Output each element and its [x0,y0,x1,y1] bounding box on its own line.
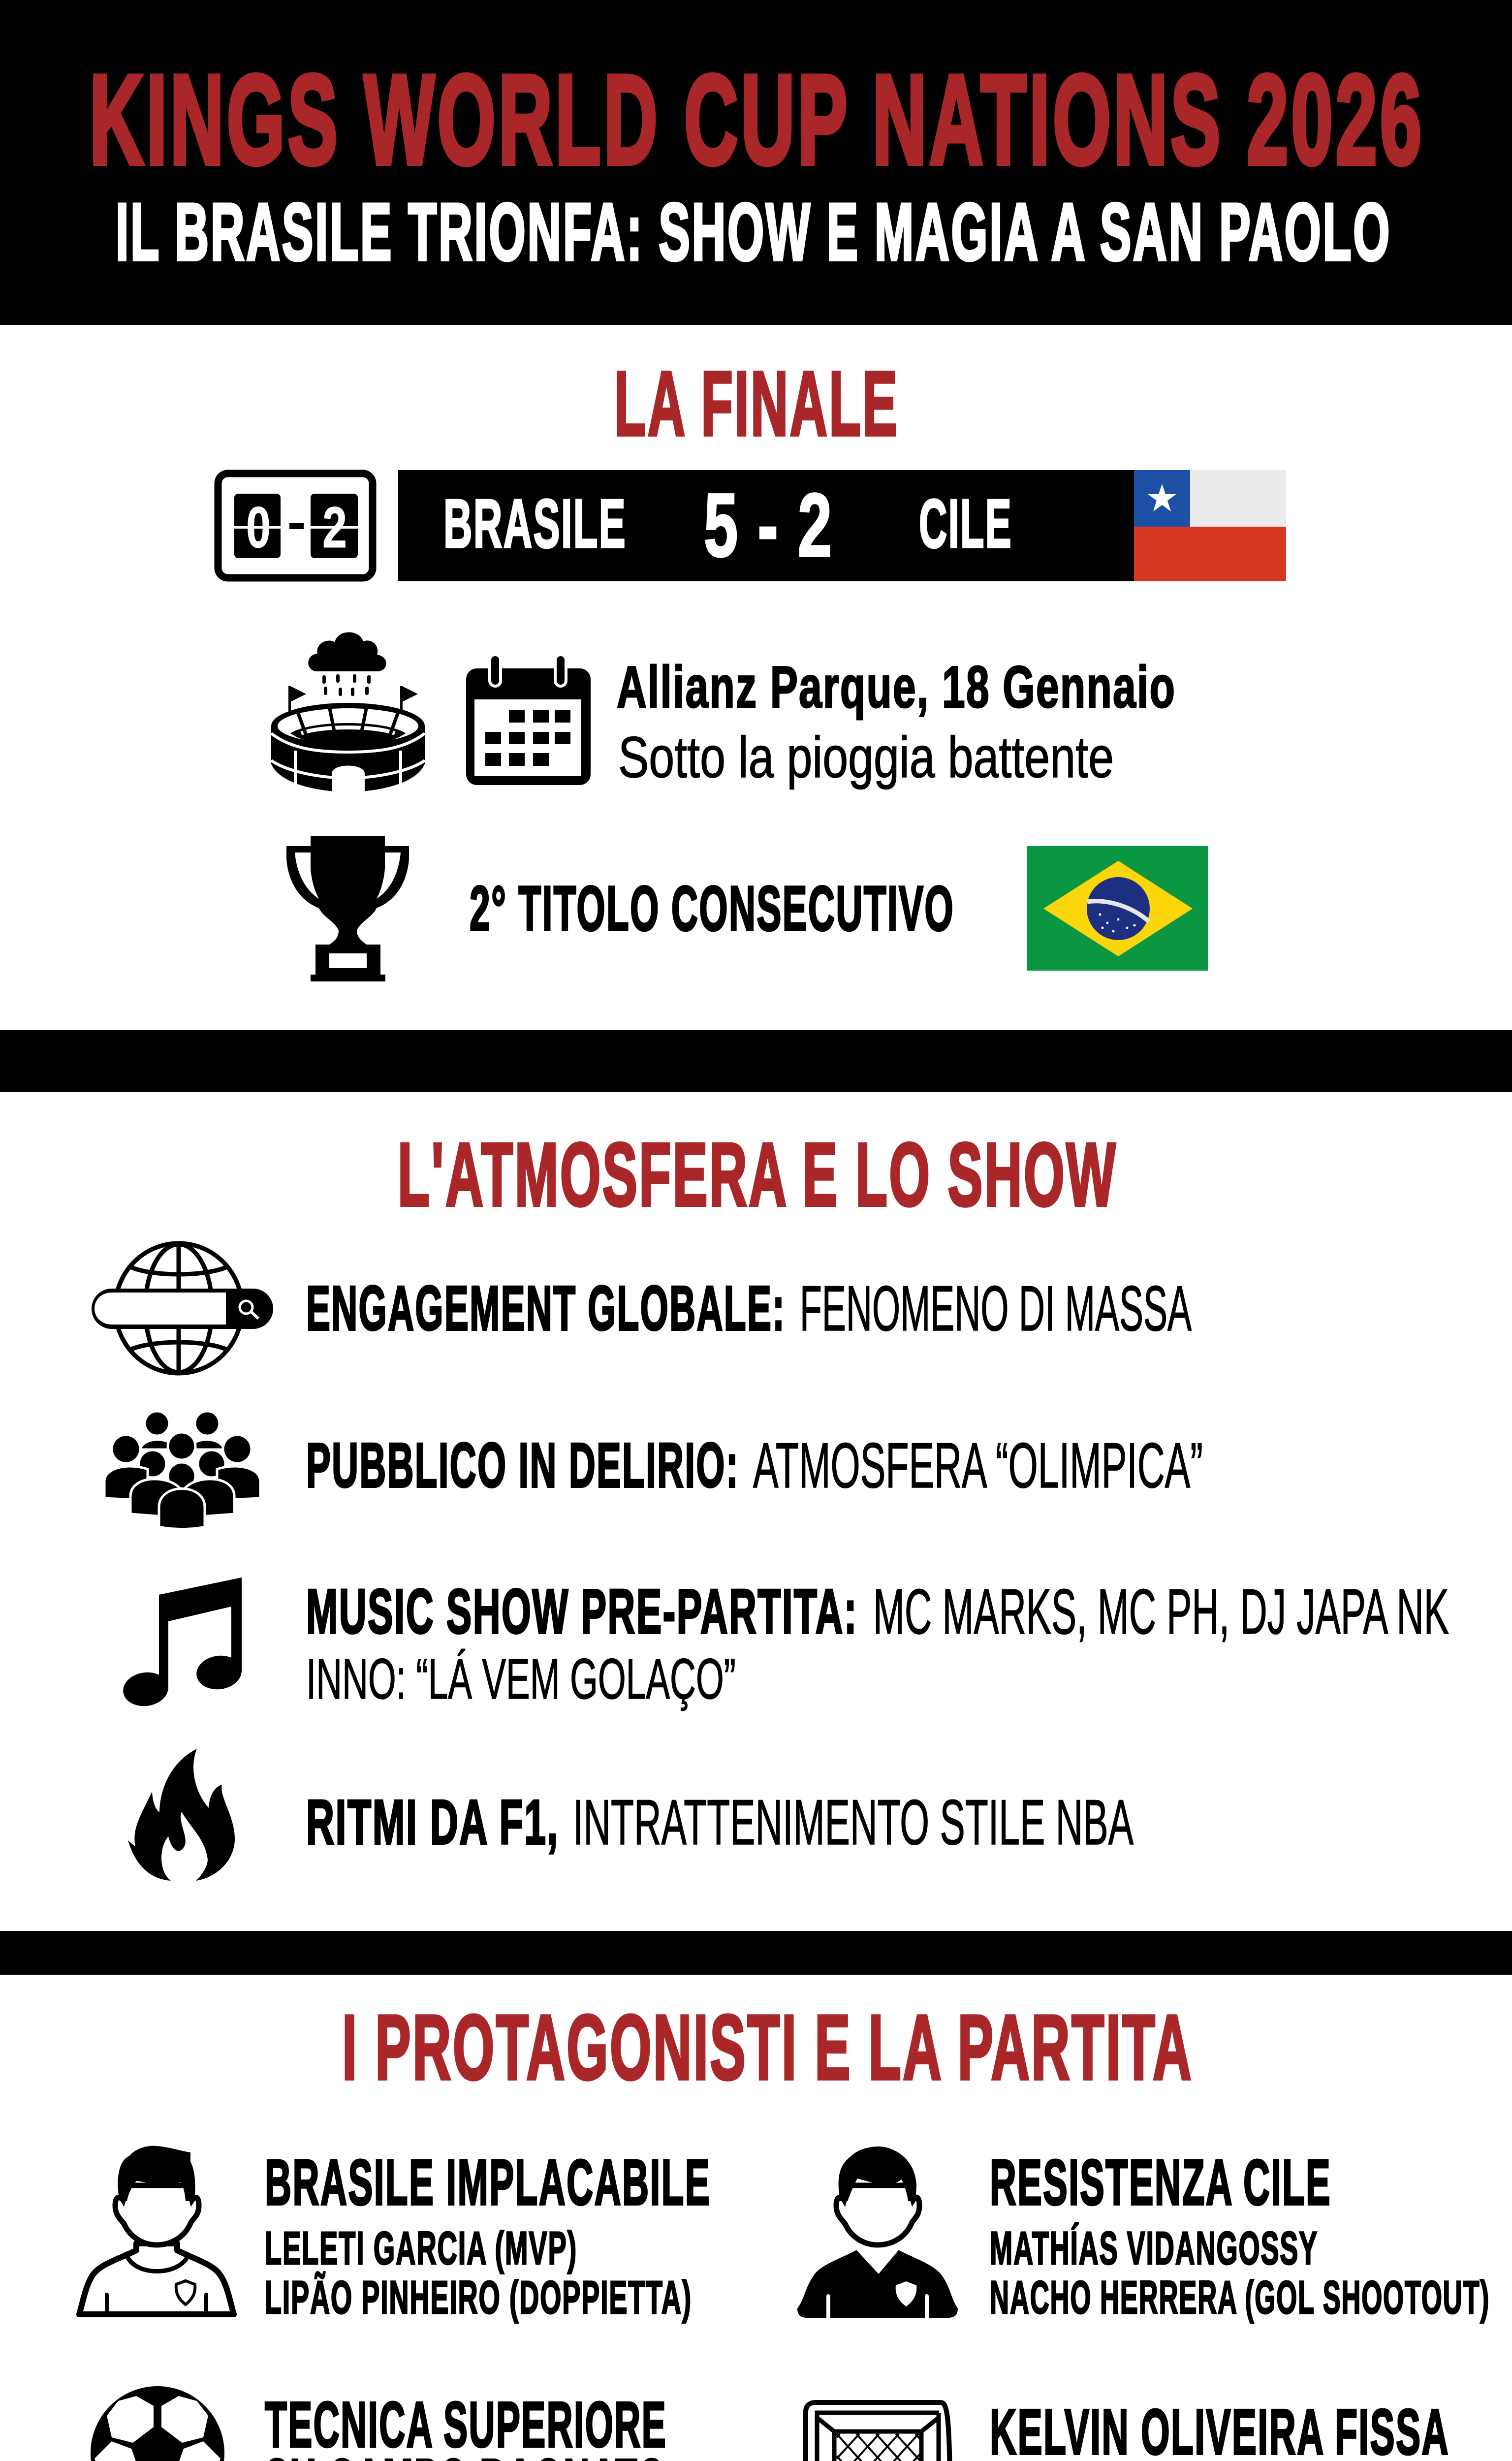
text: brasile implacabile: LIPÃO PINHEIRO (DOPPIETTA) [265,2272,692,2324]
text: tecnica superiore [265,2388,667,2461]
text: rain note: Sotto la pioggia battente [618,725,1114,790]
panel: protagonisti [0,1975,1512,2461]
text: venue and date [617,654,1176,790]
icon: crowd [104,1411,260,1529]
icon: trophy [286,836,409,981]
icon: music note [121,1578,244,1709]
icon: flame [128,1749,235,1881]
list item: pubblico: ATMOSFERA “OLIMPICA” [753,1429,1203,1501]
list item: pubblico: PUBBLICO IN DELIRIO: [306,1430,739,1501]
icon: globe search [92,1243,273,1373]
text: tecnica superiore: TECNICA SUPERIORE [265,2388,667,2461]
panel: header [0,0,1512,325]
icon: scoreboard: 2 [322,495,347,560]
text: venue and date: Allianz Parque, 18 Gennaio [617,654,1176,720]
icon: goal with ball [806,2402,950,2461]
list item: engagement: ENGAGEMENT GLOBALE: [306,1273,786,1344]
icon: stadium in rain [271,632,425,793]
score: 5 - 2 [704,474,833,575]
panel: atmosfera e show [0,1092,1512,1931]
icon: football [91,2386,224,2461]
flag: brazil [1027,846,1208,971]
text: brasile implacabile: BRASILE IMPLACABILE [265,2146,711,2218]
text: resistenza cile [990,2146,1490,2324]
text: brasile implacabile: LELETI GARCIA (MVP) [265,2222,577,2274]
list item: ritmi [306,1786,1134,1858]
list item: ritmi: INTRATTENIMENTO STILE NBA [573,1786,1134,1858]
text: second consecutive title: 2° TITOLO CONSECUTIVO [470,873,954,944]
text: brasile implacabile [265,2146,711,2324]
flags [288,686,418,713]
list item: engagement: FENOMENO DI MASSA [800,1272,1192,1344]
flag: chile [1134,470,1286,581]
icon: scoreboard [218,473,373,578]
icon: player white shirt [79,2146,234,2314]
team: brasile: BRASILE [443,485,627,562]
icon: scoreboard: 0 [246,495,271,560]
panel: la finale [0,325,1512,1030]
divider band [0,1931,1512,1975]
icon: player dark shirt [797,2146,958,2318]
list item: music show [306,1576,1449,1711]
list item: ritmi: RITMI DA F1, [306,1787,559,1858]
stadium body [271,726,425,792]
divider band [0,1030,1512,1092]
cloud [308,632,386,671]
stadium white lines [271,733,425,789]
list item: music show: MUSIC SHOW PRE-PARTITA: [306,1577,858,1647]
list item: music show: INNO: “LÁ VEM GOLAÇO” [306,1647,736,1711]
icon: calendar [466,655,591,785]
team: cile: CILE [919,485,1012,562]
scoreboard bar [398,470,1134,581]
rain [322,674,371,696]
heading: la finale: LA FINALE [614,353,899,455]
